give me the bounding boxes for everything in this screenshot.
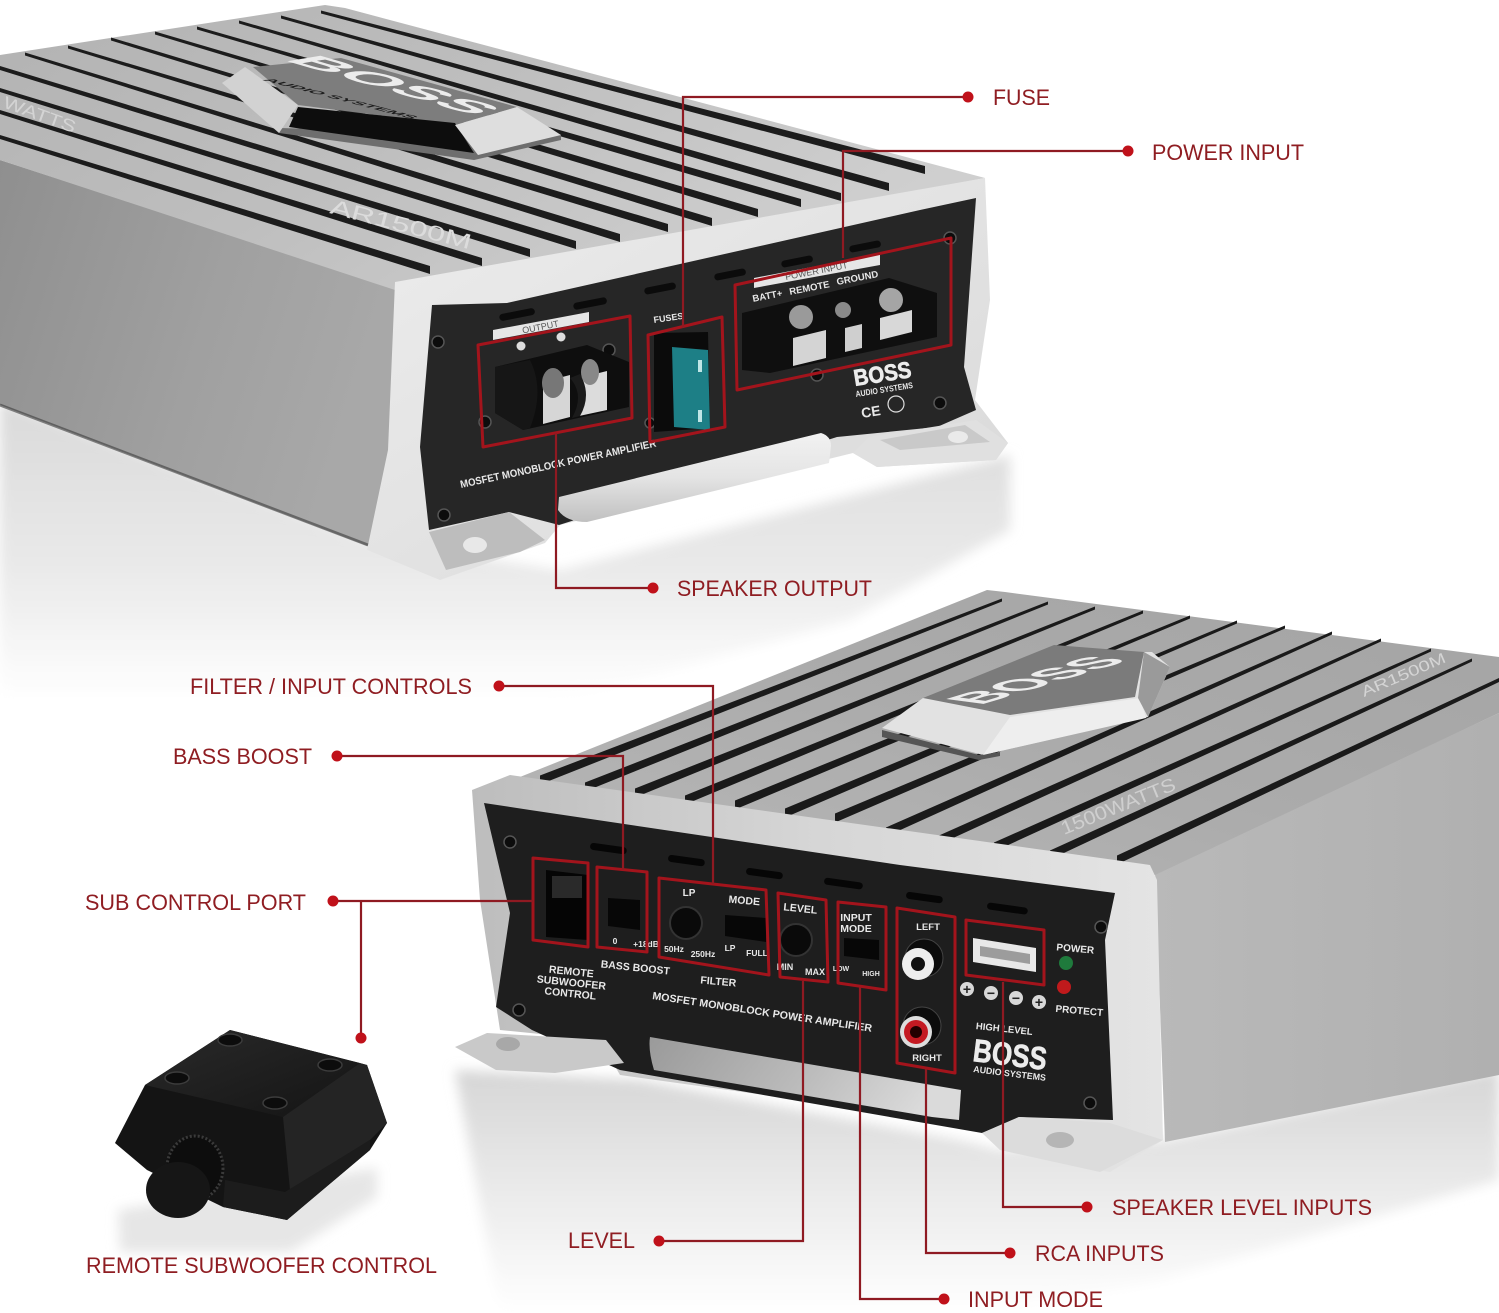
bass boost switch: +18dB xyxy=(633,939,659,949)
amplifier: top xyxy=(0,5,1008,580)
mounting feet xyxy=(429,420,1008,570)
label strip: output xyxy=(493,312,589,350)
speaker level connector: − xyxy=(987,985,995,1001)
power terminal block xyxy=(742,278,937,373)
speaker level connector xyxy=(960,938,1046,1038)
input mode switch: LOW xyxy=(833,966,850,973)
callout: filter / input controls: FILTER / INPUT CONTROLS xyxy=(190,674,472,699)
top fins xyxy=(0,5,985,290)
mounting feet xyxy=(455,1033,1163,1172)
callout: speaker level inputs: SPEAKER LEVEL INPUTS xyxy=(1112,1195,1372,1220)
callout: input mode: INPUT MODE xyxy=(968,1287,1103,1312)
label strip: power input: BATT+ xyxy=(752,288,784,305)
status LEDs: PROTECT xyxy=(1055,1004,1103,1019)
panel text: MOSFET MONOBLOCK POWER AMPLIFIER xyxy=(459,438,658,491)
speaker level connector: + xyxy=(1035,994,1043,1010)
panel logo: AUDIO SYSTEMS xyxy=(973,1064,1046,1083)
top print: AR1500M: AR1500M xyxy=(1359,650,1448,701)
input mode switch: MODE xyxy=(840,923,872,935)
label strip: power input: REMOTE xyxy=(789,279,831,298)
front panel xyxy=(420,198,976,530)
reflection: top amplifier xyxy=(0,400,1010,700)
level knob: LEVEL xyxy=(783,901,818,917)
RCA inputs: RIGHT xyxy=(912,1053,942,1064)
callout: filter / input controls xyxy=(190,674,713,884)
side print: AR1500M: AR1500M xyxy=(328,196,474,254)
chrome badge: BOSS xyxy=(932,654,1142,707)
label strip: power input: POWER INPUT xyxy=(784,260,849,282)
side shadow edge xyxy=(0,405,368,545)
front frame xyxy=(472,775,1163,1172)
bass boost switch: 0 xyxy=(613,936,618,946)
panel logo: BOSS xyxy=(852,356,913,391)
bass boost switch: BASS BOOST xyxy=(600,958,671,978)
label strip: power input: GROUND xyxy=(836,269,879,288)
callout: sub control port: SUB CONTROL PORT xyxy=(85,890,306,915)
fuse xyxy=(653,311,710,432)
callout: speaker output xyxy=(556,433,872,601)
label strip: power input xyxy=(752,254,880,305)
panel logo xyxy=(852,356,914,421)
panel logo: AUDIO SYSTEMS xyxy=(855,380,914,399)
callout: level xyxy=(568,981,803,1253)
level knob: MAX xyxy=(805,967,825,977)
front panel xyxy=(484,803,1115,1133)
sub control port: SUBWOOFER xyxy=(536,973,607,993)
chrome badge: BOSS xyxy=(272,53,516,117)
panel text: MOSFET MONOBLOCK POWER AMPLIFIER xyxy=(652,990,873,1035)
body xyxy=(115,1030,387,1220)
side face xyxy=(0,160,395,546)
mounting holes xyxy=(165,1034,342,1109)
callout: bass boost xyxy=(173,744,623,870)
bass boost switch xyxy=(600,898,671,978)
reflection: bottom amplifier xyxy=(455,1070,1499,1313)
filter controls: 50Hz xyxy=(664,944,684,954)
chrome badge xyxy=(882,645,1170,760)
fin slots xyxy=(0,10,925,274)
callout: rca inputs: RCA INPUTS xyxy=(1035,1241,1164,1266)
status LEDs: POWER xyxy=(1056,942,1095,957)
callout: input mode xyxy=(860,987,1103,1312)
callout: power input: POWER INPUT xyxy=(1152,140,1304,165)
handle xyxy=(650,1037,961,1120)
amplifier: bottom xyxy=(455,590,1499,1172)
filter controls: FILTER xyxy=(700,974,737,990)
callout: fuse: FUSE xyxy=(993,85,1050,110)
top print: watts: WATTS xyxy=(1,93,79,137)
chrome badge xyxy=(222,53,561,160)
top face xyxy=(145,1030,360,1117)
sub control port: CONTROL xyxy=(544,985,597,1003)
screws xyxy=(432,232,956,521)
reflection xyxy=(118,1168,377,1252)
callout: bass boost: BASS BOOST xyxy=(173,744,312,769)
sub control port xyxy=(536,870,607,1003)
front frame xyxy=(367,178,1008,580)
callout boxes: bottom amplifier xyxy=(533,858,1044,1073)
right face xyxy=(283,1063,387,1190)
speaker level connector: HIGH LEVEL xyxy=(975,1021,1033,1038)
caption: remote subwoofer control: REMOTE SUBWOOFER CONTROL xyxy=(86,1253,437,1278)
label strip: output: OUTPUT xyxy=(521,319,560,335)
remote subwoofer control xyxy=(115,1030,387,1252)
panel logo: CE xyxy=(860,402,882,421)
screws xyxy=(504,836,1107,1109)
filter controls: 250Hz xyxy=(691,949,715,959)
panel logo: BOSS xyxy=(971,1032,1049,1077)
vent slots xyxy=(499,240,881,321)
top print: 1500 WATTS: 1500WATTS xyxy=(1058,774,1179,840)
filter controls xyxy=(664,888,768,990)
filter controls: MODE xyxy=(728,894,760,908)
callout: speaker output: SPEAKER OUTPUT xyxy=(677,576,872,601)
status LEDs xyxy=(1055,942,1103,1019)
callout: rca inputs xyxy=(926,1069,1164,1266)
callout: power input xyxy=(843,140,1304,258)
input mode switch xyxy=(833,912,880,978)
callout: sub control port xyxy=(85,890,533,1044)
speaker level connector: − xyxy=(1012,990,1020,1006)
filter controls: FULL xyxy=(746,948,768,958)
callout: fuse xyxy=(683,85,1050,328)
callout: level: LEVEL xyxy=(568,1228,635,1253)
sub control port: REMOTE xyxy=(548,964,594,980)
RCA inputs: LEFT xyxy=(916,922,940,933)
right side face xyxy=(1155,713,1499,1142)
chrome badge: AUDIO SYSTEMS xyxy=(259,78,421,120)
handle xyxy=(558,433,831,522)
input mode switch: INPUT xyxy=(840,912,872,924)
filter controls: LP xyxy=(683,888,696,899)
callout boxes: top amplifier xyxy=(478,238,951,447)
level knob xyxy=(777,901,825,977)
fuse: FUSES xyxy=(653,311,684,325)
speaker level connector: + xyxy=(963,981,971,997)
vent slots xyxy=(590,843,1028,915)
top fins xyxy=(500,590,1499,875)
lower lip xyxy=(223,1140,370,1220)
knob xyxy=(167,1136,223,1200)
RCA inputs xyxy=(900,922,943,1064)
filter controls: LP xyxy=(725,943,736,953)
callout: speaker level inputs xyxy=(1003,982,1372,1220)
output terminal block xyxy=(495,345,629,430)
fin slots xyxy=(540,598,1499,864)
input mode switch: HIGH xyxy=(862,971,880,978)
level knob: MIN xyxy=(777,962,793,972)
